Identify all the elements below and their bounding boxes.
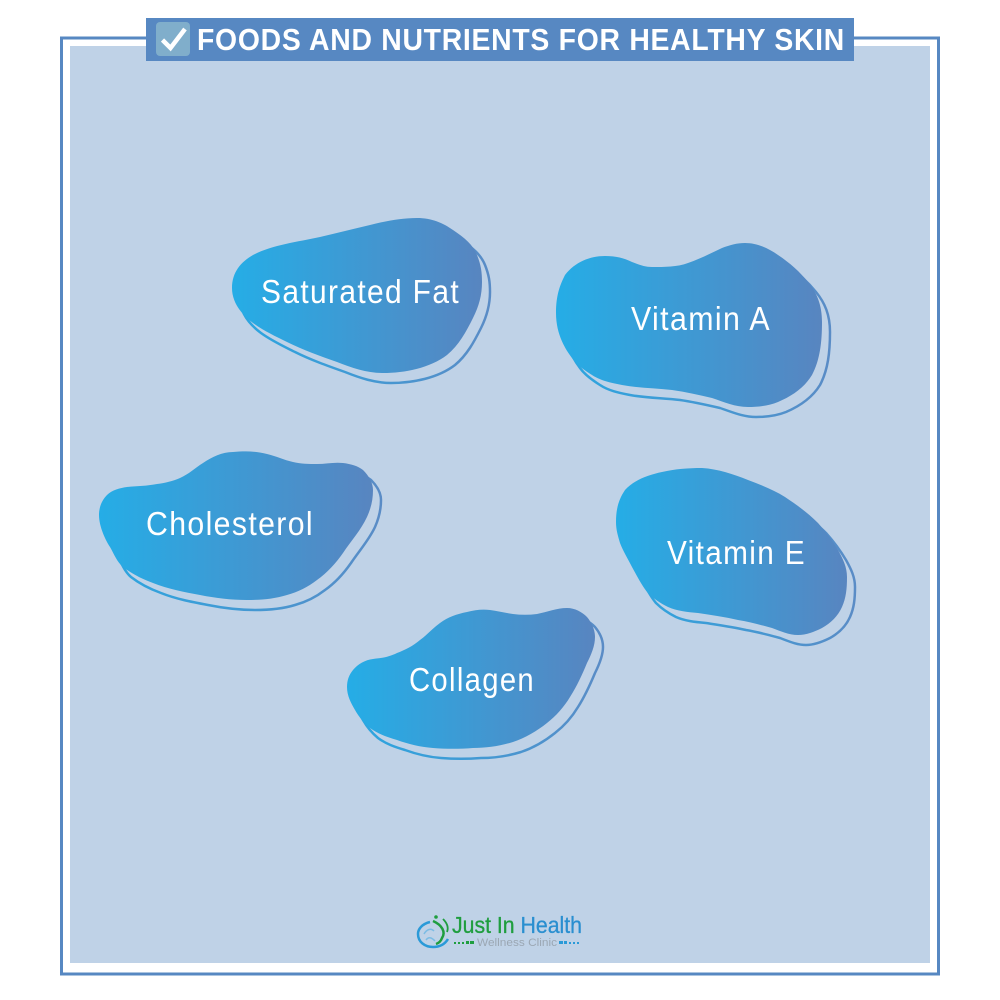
- blob: Saturated Fat: [232, 218, 490, 383]
- icon: logo mark: [418, 915, 448, 947]
- blob: Vitamin E: [616, 468, 855, 645]
- logo: Just In Health Wellness Clinic: [418, 912, 582, 949]
- blob: Saturated Fat: Saturated Fat: [261, 273, 460, 310]
- blob: Vitamin A: [556, 243, 830, 417]
- blob: Collagen: Collagen: [409, 661, 535, 698]
- title text: FOODS AND NUTRIENTS FOR HEALTHY SKIN: [197, 22, 845, 57]
- logo name: Just In Health: [452, 912, 582, 938]
- blob: Collagen: [347, 608, 603, 759]
- background panel: [70, 46, 930, 963]
- blob: Vitamin A: Vitamin A: [631, 300, 771, 337]
- blob: Vitamin E: Vitamin E: [667, 534, 806, 571]
- blob: Cholesterol: [99, 451, 381, 610]
- logo dots: [454, 941, 579, 944]
- icon: check mark: [156, 22, 190, 56]
- title banner: [146, 18, 854, 61]
- logo tagline: Wellness Clinic: [477, 937, 558, 949]
- blob: Cholesterol: Cholesterol: [146, 505, 314, 542]
